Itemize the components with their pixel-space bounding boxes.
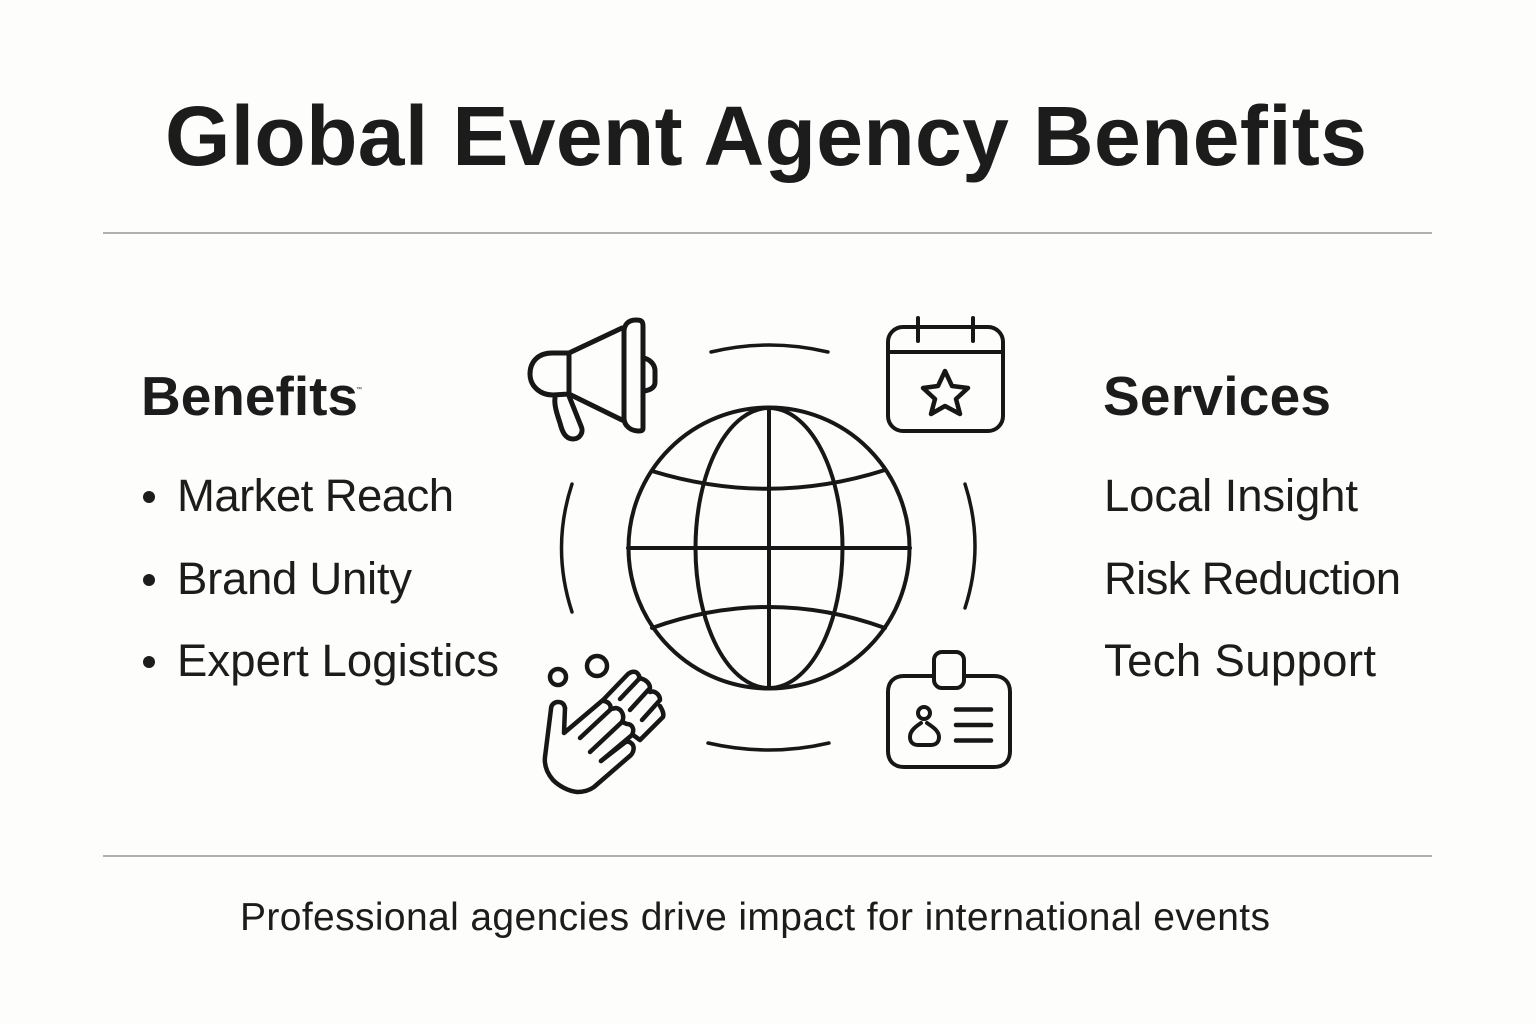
- list item: tech support: Tech Support: [1104, 635, 1376, 686]
- icon: megaphone: [530, 320, 655, 439]
- panel: benefits: [141, 365, 499, 686]
- list item: risk reduction: Risk Reduction: [1104, 553, 1401, 604]
- icon: clapping hands: [545, 656, 663, 792]
- panel: services: [1103, 365, 1401, 686]
- icon: globe: [628, 408, 910, 688]
- icon: id badge: [888, 652, 1010, 767]
- icon: calendar with star: [888, 318, 1003, 431]
- diagram: globe with icons: [530, 318, 1010, 792]
- list item: brand unity: Brand Unity: [177, 553, 412, 604]
- list item: local insight: Local Insight: [1104, 470, 1358, 521]
- title: Global Event Agency Benefits: [165, 89, 1367, 183]
- list item: expert logistics: Expert Logistics: [177, 635, 499, 686]
- heading: services: Services: [1103, 365, 1331, 427]
- heading: benefits: Benefits: [141, 365, 358, 427]
- footer caption: Professional agencies drive impact for international events: [240, 896, 1270, 939]
- list item: market reach: Market Reach: [177, 470, 454, 521]
- trademark mark: ™: [356, 386, 362, 393]
- orbit arcs: [562, 345, 975, 750]
